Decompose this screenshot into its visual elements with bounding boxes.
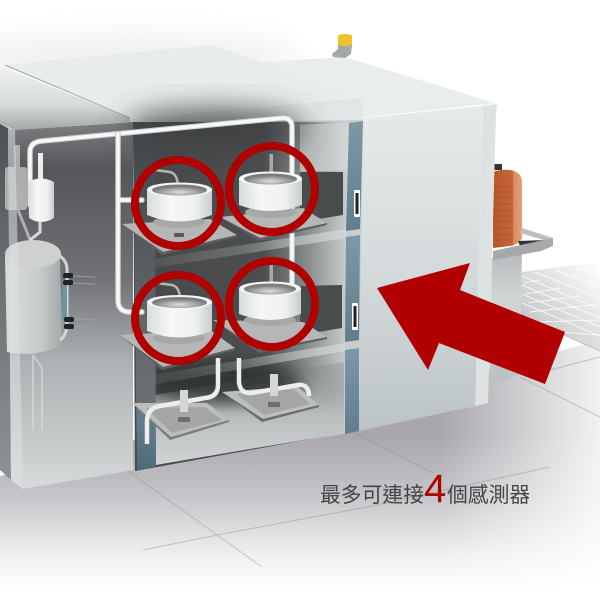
sensor: upper right tray and sensor bbox=[220, 154, 327, 241]
caption: 4 bbox=[424, 467, 446, 511]
left glass panel bbox=[8, 128, 23, 489]
lower tray right with pipe bbox=[222, 358, 319, 422]
rear tray bbox=[493, 228, 553, 260]
caption: 個感測器 bbox=[447, 484, 530, 507]
floor grid right bbox=[520, 262, 600, 351]
front filter bbox=[28, 153, 54, 240]
soft background shade behind roof bbox=[0, 36, 300, 80]
left side section bbox=[8, 122, 133, 489]
sensor: upper left tray and sensor bbox=[122, 170, 237, 255]
highlight circles bbox=[135, 146, 315, 361]
pipes bbox=[30, 118, 292, 312]
sensor: lower right tray and sensor bbox=[213, 265, 327, 353]
lower tray left with pipe bbox=[132, 358, 229, 444]
handles bbox=[352, 190, 360, 330]
orange tank bbox=[492, 164, 522, 248]
shadow over top of window bbox=[123, 108, 307, 148]
window frame bbox=[133, 120, 363, 471]
right end strip bbox=[475, 104, 497, 406]
caption: 最多可連接 bbox=[320, 484, 424, 507]
arrow bbox=[377, 263, 565, 384]
blue columns bbox=[133, 121, 363, 471]
beacon bbox=[332, 34, 352, 58]
back filter bbox=[5, 145, 30, 240]
left outer strip bbox=[0, 124, 11, 480]
machine top bbox=[0, 45, 497, 130]
right door panel bbox=[359, 106, 483, 431]
tank bbox=[5, 240, 67, 430]
sight glass knobs bbox=[63, 273, 98, 329]
rear unit: leg bbox=[489, 252, 522, 385]
sensor: lower left tray and sensor bbox=[120, 283, 235, 370]
